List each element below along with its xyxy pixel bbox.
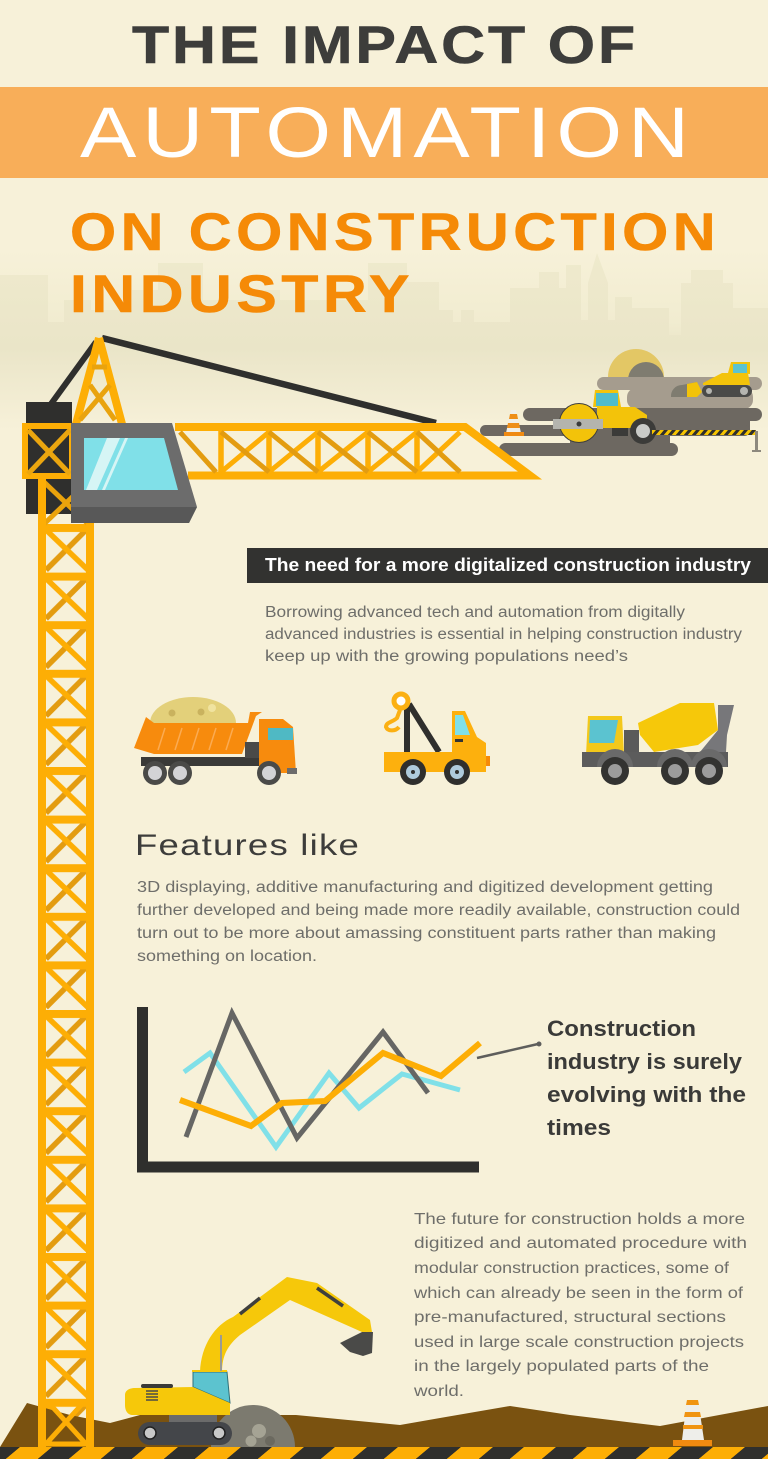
future paragraph xyxy=(413,1211,747,1400)
cab window xyxy=(84,438,178,490)
line chart xyxy=(142,1007,542,1167)
excavator arm xyxy=(200,1277,372,1372)
features paragraph: 3D displaying, additive manufacturing and digitized development getting xyxy=(137,879,713,896)
bulldozer xyxy=(671,362,752,397)
icon: tow truck xyxy=(384,694,490,785)
future paragraph: modular construction practices, some of xyxy=(414,1260,730,1277)
crane stay cables xyxy=(51,338,436,423)
chart callout text: evolving with the xyxy=(547,1082,746,1107)
crane counterweight xyxy=(26,402,72,514)
chart axes xyxy=(142,1007,479,1167)
engine hood xyxy=(141,1384,173,1388)
sand mound xyxy=(608,349,664,380)
illustration: road works scene xyxy=(480,349,762,456)
skyline silhouette xyxy=(0,250,768,430)
chart callout text: Construction xyxy=(547,1016,696,1041)
gravel mound xyxy=(211,1405,295,1447)
chart callout text: times xyxy=(547,1115,611,1140)
crane tower top xyxy=(76,338,122,424)
features paragraph: turn out to be more about amassing constituent parts rather than making xyxy=(137,925,716,942)
excavator xyxy=(125,1277,373,1447)
future paragraph: used in large scale construction projects xyxy=(414,1334,744,1351)
title: on construction industry xyxy=(70,203,720,324)
intro paragraph: Borrowing advanced tech and automation from digitally xyxy=(265,604,685,621)
intro paragraph: advanced industries is essential in helping construction industry xyxy=(265,626,742,643)
intro paragraph: keep up with the growing populations need’s xyxy=(265,648,628,665)
future paragraph: The future for construction holds a more xyxy=(414,1211,745,1228)
crane jib xyxy=(175,427,530,476)
barrier tape xyxy=(652,430,761,452)
excavator cab xyxy=(192,1335,230,1403)
excavator tracks xyxy=(138,1415,232,1445)
excavator bucket xyxy=(340,1332,373,1356)
features paragraph: something on location. xyxy=(137,948,317,965)
title band: automation: AUTOMATION xyxy=(80,94,695,173)
hazard stripe floor xyxy=(0,1447,768,1459)
intro paragraph xyxy=(265,604,742,665)
hydraulic rods xyxy=(240,1288,343,1314)
features paragraph: further developed and being made more readily available, construction could xyxy=(137,902,740,919)
features paragraph xyxy=(137,879,740,965)
title band: automation xyxy=(0,87,768,178)
excavator body xyxy=(125,1387,230,1415)
road roller xyxy=(553,390,656,444)
crane xyxy=(25,338,530,1447)
icon: cement mixer truck xyxy=(582,703,734,785)
future paragraph: pre-manufactured, structural sections xyxy=(414,1309,726,1326)
chart callout text: industry is surely xyxy=(547,1049,742,1074)
icon: dump truck xyxy=(134,697,297,785)
traffic cone small xyxy=(504,410,524,436)
title: on construction industry: INDUSTRY xyxy=(70,265,414,324)
crane mast base over ground xyxy=(38,1400,94,1447)
heading bar: The need for a more digitalized construction industry xyxy=(265,555,751,575)
chart callout text xyxy=(547,1016,746,1140)
crane cab xyxy=(71,423,197,523)
orange series xyxy=(180,1043,480,1126)
heading bar xyxy=(247,548,768,583)
title: the impact of: THE IMPACT OF xyxy=(132,16,638,75)
crane mast head frame xyxy=(25,426,72,476)
future paragraph: digitized and automated procedure with xyxy=(414,1235,747,1252)
chart pointer xyxy=(477,1042,542,1058)
future paragraph: which can already be seen in the form of xyxy=(413,1285,744,1302)
heading: features like: Features like xyxy=(135,829,360,862)
traffic cone large xyxy=(673,1400,712,1446)
future paragraph: world. xyxy=(413,1383,464,1400)
title: on construction industry: ON CONSTRUCTION xyxy=(70,203,720,262)
cyan series xyxy=(184,1053,460,1147)
future paragraph: in the largely populated parts of the xyxy=(414,1358,709,1375)
excavator vent xyxy=(146,1391,158,1400)
crane mast xyxy=(38,479,94,1447)
ground xyxy=(0,1403,768,1447)
grey series xyxy=(186,1013,428,1138)
road layers xyxy=(480,377,762,456)
